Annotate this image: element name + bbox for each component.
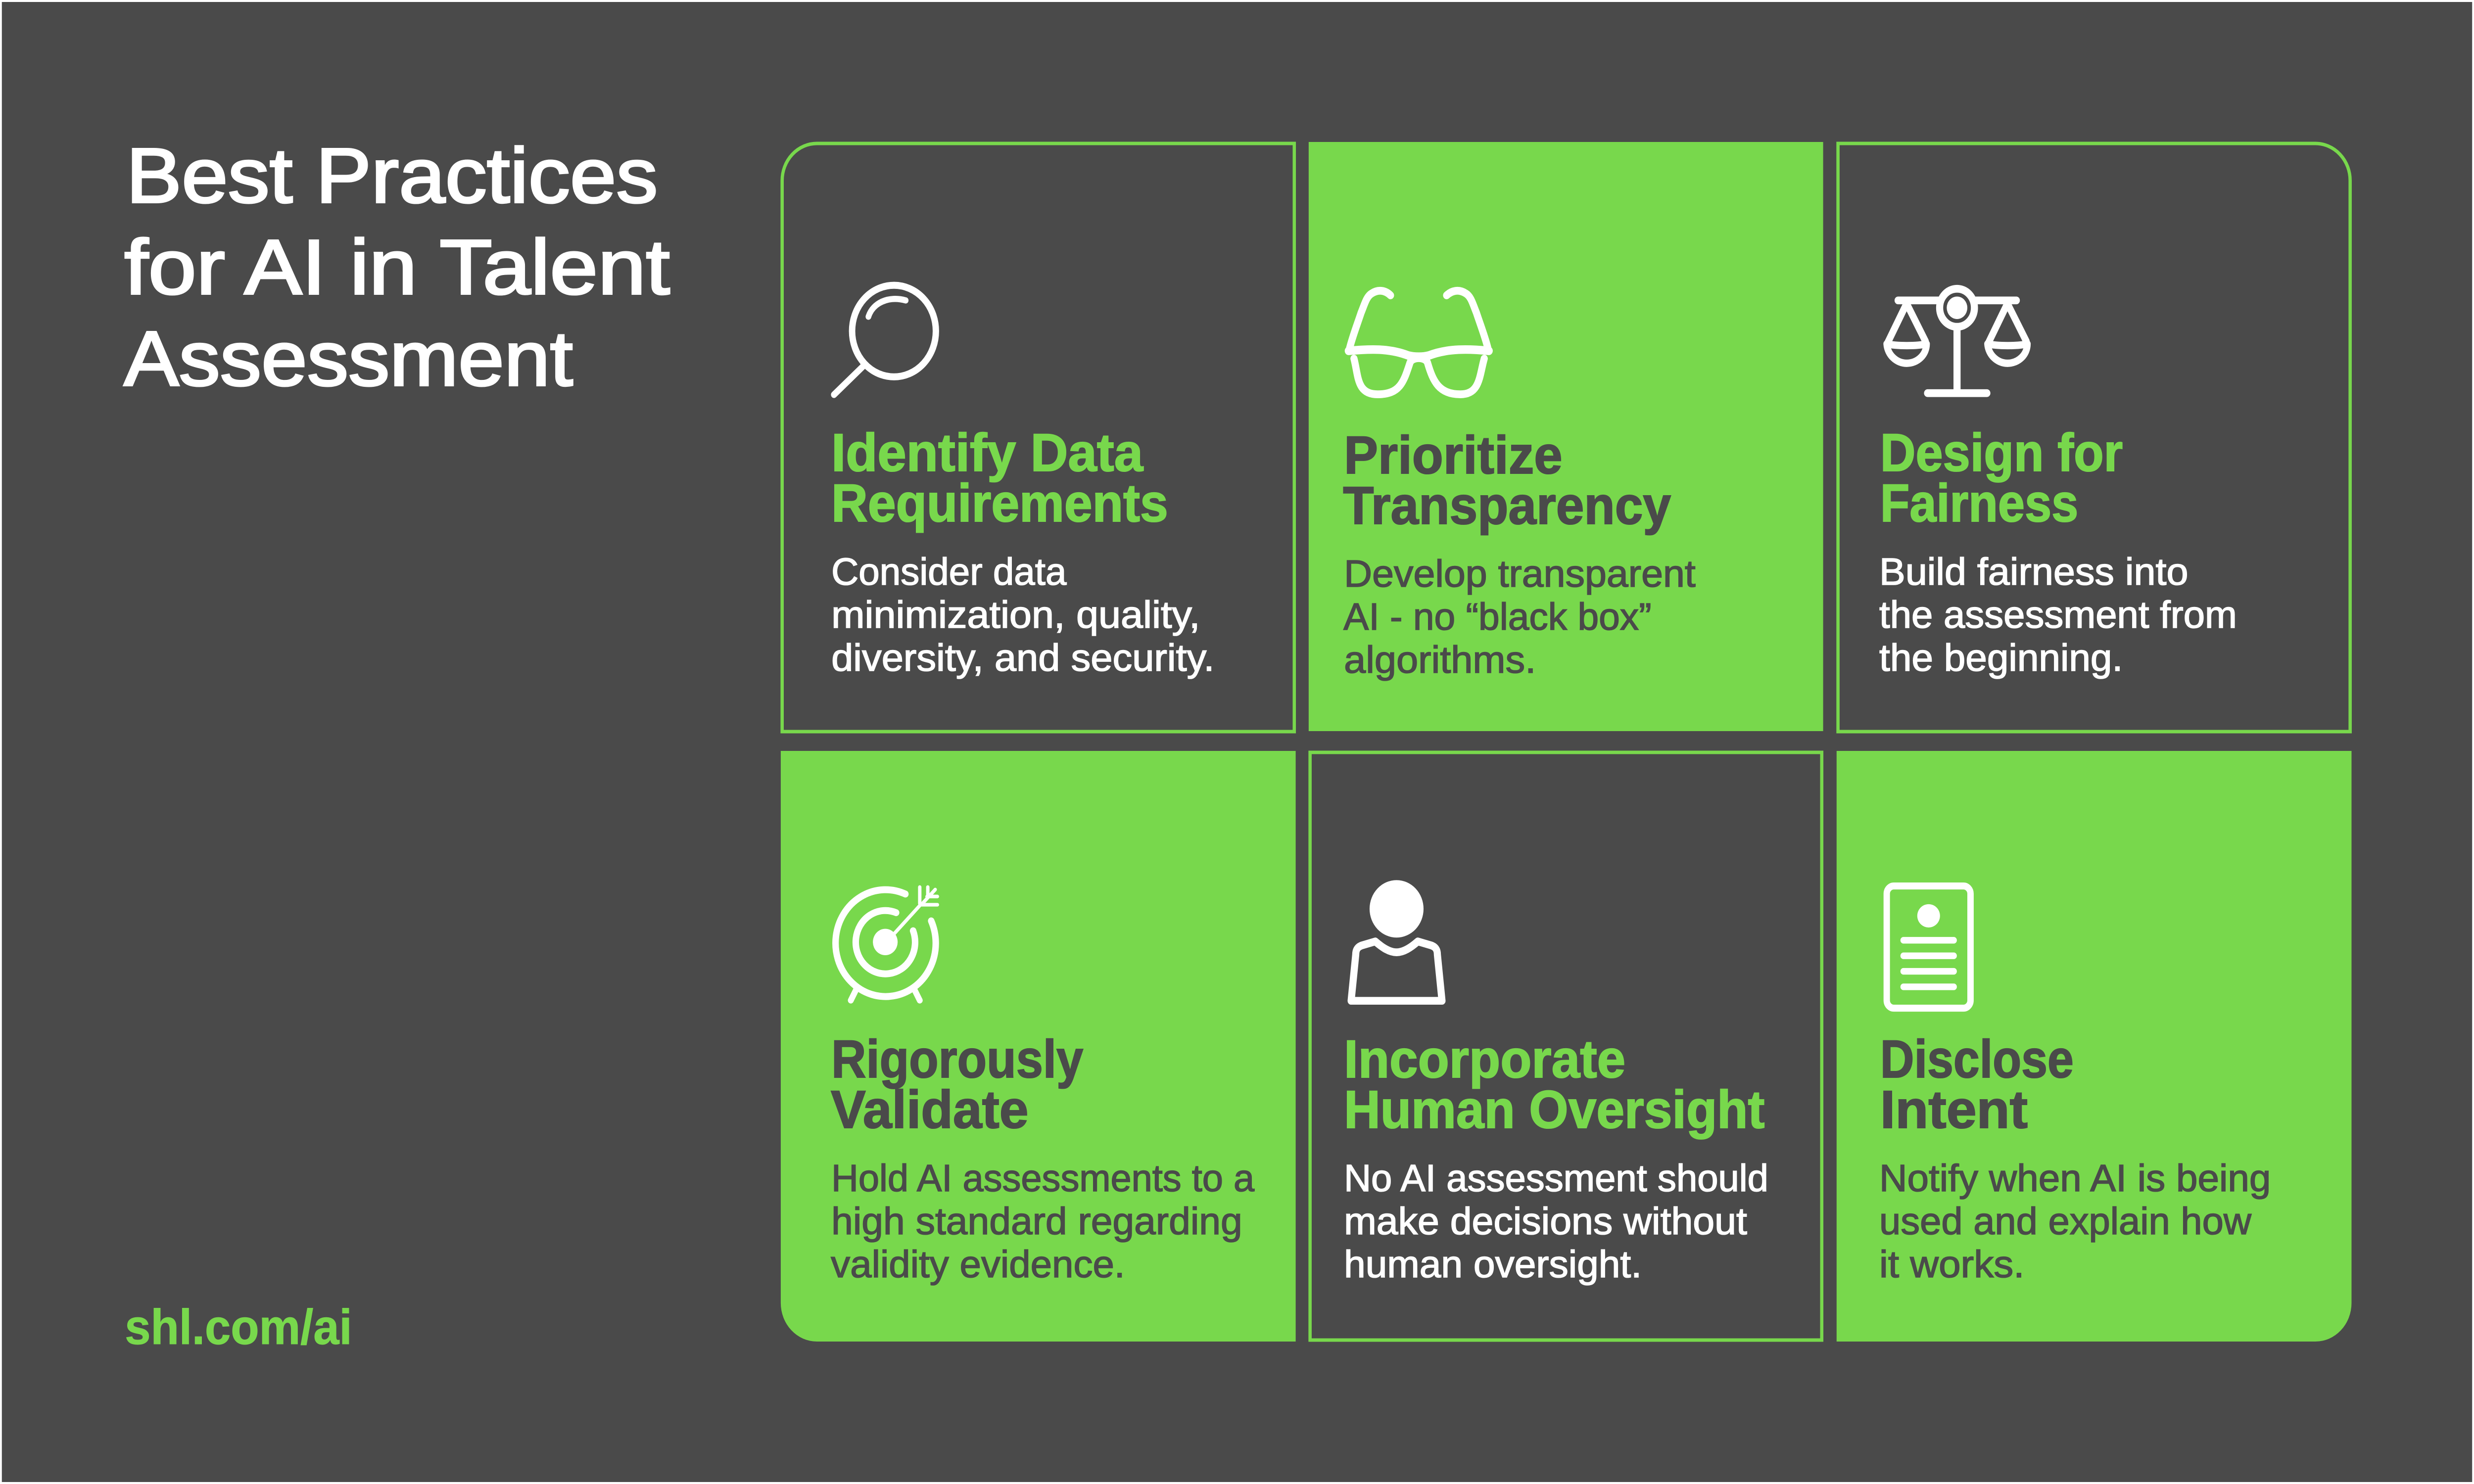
- body text: Notify when AI is being: [1879, 1157, 2271, 1200]
- body text: [1343, 553, 1696, 681]
- card background: [1837, 751, 2351, 1342]
- panel: Prioritize Transparency: [1309, 142, 1823, 731]
- body text: [831, 551, 1215, 679]
- heading: Fairness: [1880, 473, 2078, 533]
- icon: glasses: [1349, 291, 1489, 394]
- body text: algorithms.: [1344, 639, 1536, 681]
- heading: [831, 422, 1168, 533]
- icon: person: [1351, 880, 1442, 1001]
- body text: [831, 1157, 1254, 1286]
- card background: [1309, 142, 1823, 731]
- body text: used and explain how: [1879, 1200, 2251, 1243]
- heading: Human Oversight: [1344, 1079, 1764, 1139]
- heading: Identify Data: [831, 422, 1143, 482]
- title: for AI in Talent: [124, 224, 670, 311]
- body text: validity evidence.: [831, 1243, 1125, 1286]
- body text: the beginning.: [1879, 637, 2123, 679]
- heading: Incorporate: [1344, 1029, 1625, 1089]
- body text: human oversight.: [1344, 1243, 1642, 1286]
- body text: it works.: [1879, 1243, 2025, 1286]
- heading: Prioritize: [1344, 425, 1563, 485]
- icon: document with profile: [1887, 886, 1970, 1008]
- heading: [1343, 425, 1671, 535]
- body text: minimization, quality,: [831, 594, 1200, 636]
- heading: Rigorously: [831, 1029, 1083, 1089]
- panel: Rigorously Validate: [781, 751, 1296, 1342]
- card outline: [1838, 143, 2350, 732]
- body text: diversity, and security.: [831, 637, 1215, 679]
- body text: No AI assessment should: [1344, 1157, 1768, 1200]
- heading: Transparency: [1343, 475, 1671, 535]
- heading: Requirements: [831, 473, 1168, 533]
- panel: Identify Data Requirements: [782, 143, 1294, 732]
- icon: magnifying glass: [834, 285, 936, 395]
- title: Assessment: [124, 316, 573, 402]
- body text: Consider data: [831, 551, 1067, 593]
- body text: AI - no “black box”: [1343, 596, 1652, 638]
- card background: [781, 751, 1296, 1342]
- title: Best Practices: [126, 133, 658, 219]
- footer link: shl.com/ai: [125, 1299, 352, 1355]
- heading: [1880, 422, 2123, 533]
- heading: Intent: [1880, 1079, 2028, 1139]
- body text: Build fairness into: [1879, 551, 2188, 593]
- body text: [1879, 551, 2237, 679]
- panel: Disclose Intent: [1837, 751, 2351, 1342]
- heading: Design for: [1880, 422, 2123, 482]
- heading: Disclose: [1880, 1029, 2074, 1089]
- icon: target with arrow: [836, 887, 937, 1000]
- body text: [1879, 1157, 2271, 1286]
- body text: the assessment from: [1879, 594, 2237, 636]
- heading: [831, 1029, 1083, 1139]
- panel: Incorporate Human Oversight: [1310, 752, 1822, 1340]
- card outline: [782, 143, 1294, 732]
- title: [124, 133, 670, 402]
- heading: [1344, 1029, 1764, 1139]
- card outline: [1310, 752, 1822, 1340]
- body text: Hold AI assessments to a: [831, 1157, 1254, 1200]
- heading: Validate: [831, 1079, 1029, 1139]
- body text: high standard regarding: [831, 1200, 1242, 1243]
- body text: [1344, 1157, 1768, 1286]
- heading: [1880, 1029, 2074, 1139]
- panel: Design for Fairness: [1838, 143, 2350, 732]
- body text: Develop transparent: [1344, 553, 1696, 595]
- icon: balance scale: [1887, 289, 2027, 393]
- body text: make decisions without: [1344, 1200, 1747, 1243]
